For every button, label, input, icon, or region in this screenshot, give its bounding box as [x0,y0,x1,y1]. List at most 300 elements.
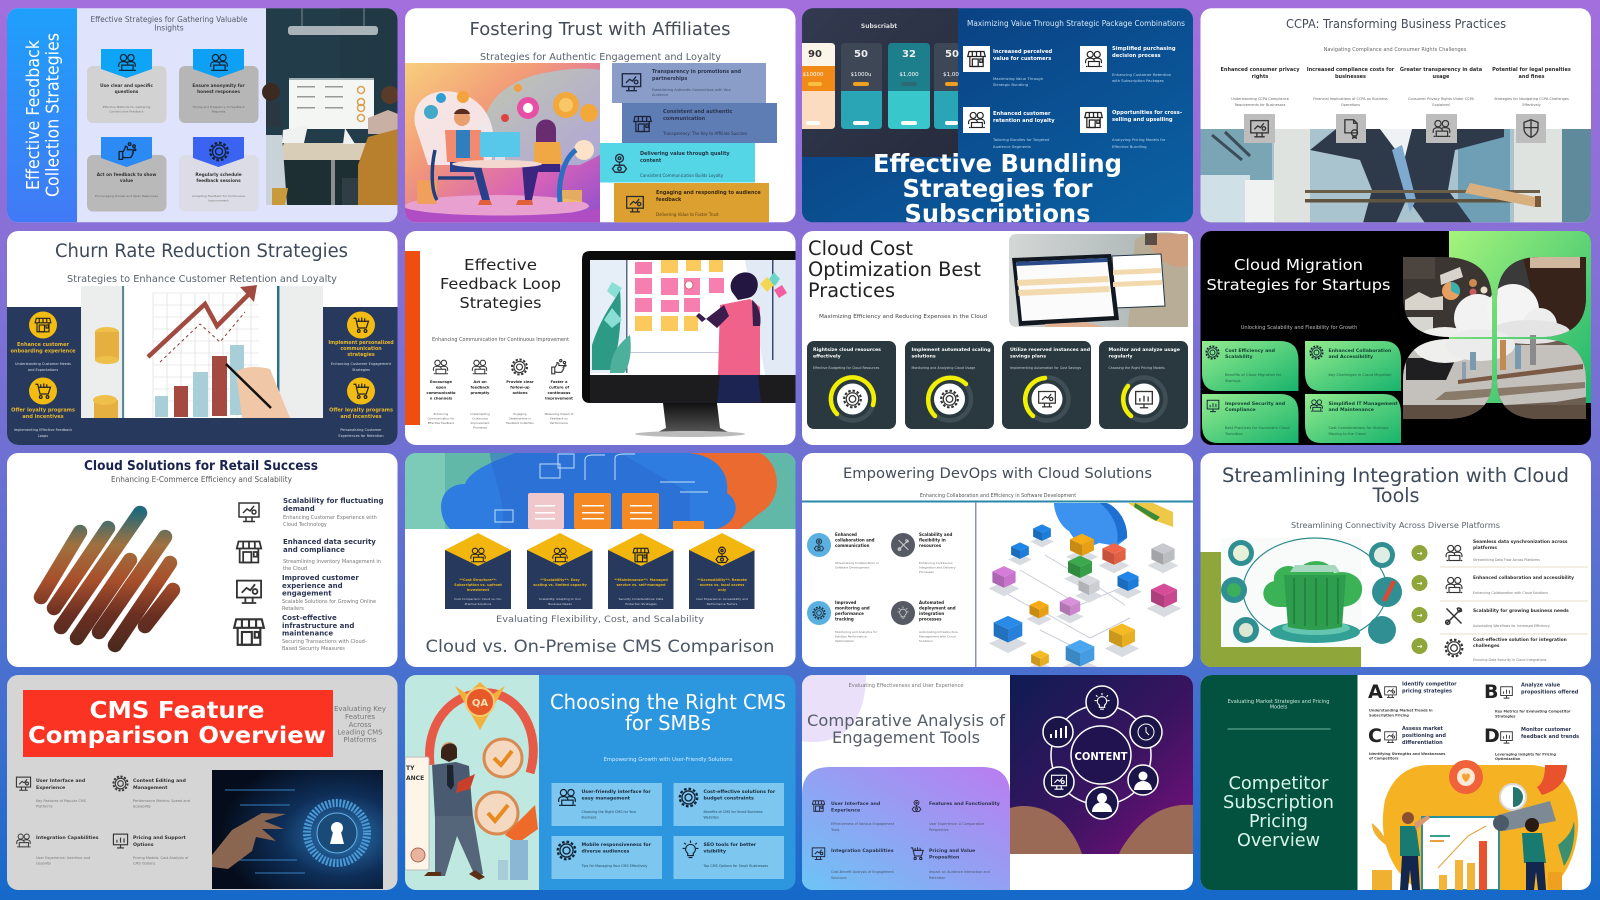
item: pricing: Pricing and Support [133,835,187,841]
item: cross-selling: selling and upselling [1112,117,1173,123]
heading: Maximizing Value Through Strategic Package Combinations [967,19,1185,28]
item: pricing [113,834,189,866]
box: cost-effective [674,783,784,826]
bar: consistent communication: Transparency: The Key to Affiliate Success [662,131,747,136]
title: Subscriptions [904,199,1090,228]
sidebar subtitle: Evaluating Market Strategies and Pricing [1228,699,1329,705]
box: cost-effective: Cost-effective solutions for [704,789,776,795]
item A [1368,681,1457,718]
card: security [1202,394,1298,443]
item: scalability: Enhancing Continuous [919,561,953,565]
column: open channels: Communication for [428,416,455,420]
card: automated scaling: Monitoring and Analyzing Cloud Usage [912,366,975,370]
side subtitle [334,705,386,744]
column: act promptly: Implementing [470,412,490,416]
item: personalized communication: Implement personalized [328,340,394,346]
item: data security: Streamlining Inventory Management in [283,559,381,565]
item: user interface: User Interface and [831,801,880,807]
row: data synchronization: Streamlining Data Flow Across Platforms [1473,558,1540,562]
column: culture: Foster a [551,380,568,384]
item: monitoring [807,600,878,643]
card: automated scaling: solutions [912,354,936,360]
row: cost-effective: challenges [1473,643,1500,649]
image: pricing table mockup [802,8,959,157]
photo: laptop with spreadsheet [1009,232,1188,327]
item: personalized communication: Enhancing Customer Engagement [331,362,392,366]
item: onboarding: Understanding Customer Needs [15,362,71,366]
column: cost structure: investment [467,588,489,592]
title: Optimization Best [808,258,981,281]
title [807,711,1005,747]
column: open channels: communicatio [426,391,456,395]
panel: CCPA Transforming Business Practices [1200,8,1592,223]
item: customer retention: retention and loyalty [993,118,1055,124]
column: culture [545,360,574,425]
bar: quality content: content [640,158,662,164]
column: scalability: Business Needs [548,602,572,606]
column: penalties: and fines [1519,74,1544,80]
item: customer experience [237,574,376,612]
item: scalability: resources [919,543,942,548]
illustration: QA businessman: QA [472,698,488,709]
box: mobile responsiveness: Mobile responsiveness for [582,842,652,848]
subtitle: Evaluating Flexibility, Cost, and Scalability [496,615,705,625]
item: purchasing decision: Enhancing Customer Retention [1112,72,1172,77]
item: customer experience: Improved customer [282,574,359,582]
accent bar [405,251,420,425]
column: follow-up: Provide clear [506,380,534,384]
item: personalized communication [328,312,394,372]
bar: quality content: Consistent Communication Builds Loyalty [640,173,724,178]
title: Engagement Tools [832,728,980,747]
row: data synchronization: platforms [1473,545,1497,551]
photo quadrants: cloud over laptop [1403,257,1586,419]
title: Empowering DevOps with Cloud Solutions [843,466,1152,482]
item: loyalty programs right [329,378,393,438]
box: SEO tools [674,836,784,879]
title: Fostering Trust with Affiliates [470,19,730,40]
sidebar title [7,8,77,223]
item: data security: Enhanced data security [283,538,376,546]
green accent block [1449,231,1591,403]
box: SEO tools: Top CMS Options for Small Businesses [702,864,768,868]
column: follow-up: Stakeholders in [509,416,531,420]
sidebar subtitle [1228,699,1329,710]
item D: feedback and trends [1521,734,1579,740]
item A: Subscription Pricing [1369,714,1409,718]
item: features [912,800,1000,832]
row: scalability: → [1417,612,1423,620]
card: cost efficiency: Startups [1225,379,1241,383]
column: open channels: Encourage [430,380,452,384]
subtitle: Navigating Compliance and Consumer Rights Challenges [1324,47,1467,53]
column: privacy rights [1220,67,1300,143]
card: reserved instances: savings plans [1010,354,1046,360]
column: compliance costs: Financial Implications of CCPA on Business [1313,97,1388,101]
column: open channels [426,360,456,425]
item: scalability [239,497,383,528]
title: Strategies for [902,174,1093,203]
box: SEO tools: visibility [704,848,726,854]
card: security: Compliance [1225,407,1256,413]
column: penalties: Potential for legal penalties [1492,67,1571,73]
subtitle: Enhancing Collaboration and Efficiency in Software Development [920,493,1076,499]
column: privacy rights: Requirements for Businesses [1235,103,1286,107]
item: data security [237,538,381,572]
sidebar subtitle: Models [1270,704,1288,710]
heading: Effective Strategies for Gathering Valuable [90,15,248,24]
item C: Identifying Strengths and Weaknesses [1369,752,1445,756]
item: features: Features and Functionality [929,801,1000,807]
sidebar title: Overview [1237,831,1320,851]
item: personalized communication: communication [340,346,382,352]
item B: Analyze value [1521,682,1561,688]
side subtitle: Leading CMS [337,728,383,736]
card: monitor usage [1099,341,1188,429]
column: maintenance: Security Considerations: Data [619,597,664,601]
item: integration: Usability [36,862,51,866]
strategy card: act on feedback [87,137,166,212]
item: pricing: Impact on Audience Interaction and [929,870,990,874]
column: act promptly: feedback [470,386,490,390]
row: data synchronization: → [1417,550,1423,558]
panel: Comparative Analysis of Engagement Tools [802,675,1193,890]
item: automation: Automating Infrastructure [919,630,958,634]
row: scalability: Automating Workflows for Increased Efficiency [1473,624,1550,628]
item: automation: Solutions [919,639,933,643]
bar: transparency: Audience [652,93,668,97]
illustration: isometric cloud network [989,503,1181,677]
panel: Cloud Cost Optimization [802,231,1193,446]
dark green sidebar [1200,675,1358,890]
row: data synchronization: Seamless data synchronization across [1473,539,1568,545]
title [808,237,981,302]
box: mobile responsiveness: diverse audiences [582,848,630,854]
item: user interface [16,777,87,808]
column: accessibility: Performance Factors [707,602,738,606]
bar: transparency: Establishing Authentic Connections with Your [652,88,732,92]
item: purchasing decision: with Subscription Packages [1112,78,1164,83]
row: collaboration: → [1417,580,1423,588]
item: features: User Experience: A Comparative [929,822,984,826]
item A: Identify competitor [1402,682,1457,688]
title: Streamlining Integration with Cloud [1222,464,1569,487]
item: monitoring: Monitoring and Analytics for [835,630,878,634]
item: collaboration: communication [835,543,870,548]
item: cost effective: Based Security Measures [282,646,345,652]
item: pricing [911,847,990,880]
panel: Cloud vs On-Premise CMS Comparison [405,453,796,668]
column: scalability [527,533,593,609]
item: collaboration [807,532,879,570]
column: scalability: scaling vs. limited capacity [533,583,588,587]
item: collaboration: collaboration and [835,538,875,542]
illustration: QA businessman: TY [406,765,415,772]
card: reserved instances [1002,341,1091,429]
item: onboarding: onboarding experience [10,348,76,354]
image: pricing table mockup: $10000 [802,72,824,78]
sidebar title: Collection Strategies [44,33,64,197]
item: user interface: Platforms [36,804,53,808]
strategy card: act on feedback: value [120,178,133,184]
item: cross-selling: Effective Bundling [1112,144,1147,149]
item: monitoring: Improved [835,600,857,605]
box: mobile responsiveness [552,836,662,879]
item: integration [17,834,99,866]
card: IT management: Cost Considerations for Startups [1328,426,1388,430]
item: personalized communication: strategies [347,352,375,358]
side subtitle: Evaluating Key [334,705,386,713]
card: rightsize resources: effectively [813,354,841,360]
item: cost effective: Cost-effective [282,614,337,622]
column: act promptly: Processes [473,426,487,430]
row: collaboration: Enhancing Collaboration with Cloud Solutions [1473,591,1548,595]
item: loyalty programs right: Experiences for Retention [338,434,384,438]
column: data transparency: usage [1433,74,1450,80]
card: collaboration: and Accessibility [1328,354,1373,360]
item: pricing: Retention [929,876,945,880]
subtitle: Evaluating Effectiveness and User Experience [849,683,963,689]
title: Strategies for Startups [1206,276,1391,294]
image: pricing table mockup: Subscriabt [861,23,897,30]
item: monitoring: DevOps Performance [835,634,867,638]
bar: transparency [612,63,766,103]
subtitle: Streamlining Connectivity Across Diverse Platforms [1291,521,1500,530]
item: automation: processes [919,616,942,622]
title: Comparative Analysis of [807,711,1005,730]
column: culture: improvement [545,396,573,400]
card: IT management: Simplified IT Management [1328,401,1398,407]
item: scalability: Scalability for fluctuating [283,497,383,505]
column: privacy rights: Enhanced consumer privacy [1220,67,1300,73]
item: perceived value: value for customers [993,56,1051,62]
item: cross-selling: Opportunities for cross- [1112,110,1182,116]
item: user interface: Effectiveness of Various Engagement [831,822,895,826]
card: reserved instances: Implementing Automation for Cost Savings [1010,366,1081,370]
panel: Cloud Migration Strategies [1200,231,1592,446]
title: Practices [808,279,895,302]
row: collaboration [1412,575,1574,595]
sidebar title: Effective Feedback [24,39,44,190]
column: data transparency: Explained [1432,103,1450,107]
item: data security: the Cloud [283,566,307,572]
card: security: Transition [1224,432,1243,436]
item: user interface: Key Features of Popular CMS [36,799,87,803]
sidebar title: Competitor [1228,774,1329,794]
item: pricing: Pricing Models: Cost Analysis of [133,856,189,860]
item: integration: Integration Capabilities [831,848,894,854]
column: open channels: Effective Feedback [428,421,455,425]
card: rightsize resources [807,341,896,429]
item: collaboration: Software Development [835,566,870,570]
panel: Competitor Subscription Pricing Overview [1200,675,1592,890]
item C: of Competitors [1369,756,1398,760]
column: maintenance [608,533,674,609]
photo: meeting room [262,8,399,205]
title: Tools [1372,484,1420,507]
title: for SMBs [625,711,711,735]
bar: consistent communication [622,103,777,143]
item: customer experience: Retailers [282,606,304,612]
card: automated scaling: Implement automated scaling [912,347,991,353]
column: compliance costs [1307,67,1395,143]
heading [90,15,248,32]
item: onboarding: and Expectations [28,368,58,372]
column: penalties: Effectively [1522,103,1541,107]
item: onboarding: Enhance customer [17,342,70,348]
item: customer retention: Audience Segments [993,144,1031,149]
strategy card: clear questions [87,49,166,123]
item: user interface [812,801,895,832]
strategy card: anonymity: Ensure anonymity for [192,83,245,89]
subtitle: Unlocking Scalability and Flexibility for Growth [1241,325,1357,331]
column: penalties: Strategies for Navigating CCPA Challenges [1494,97,1569,101]
column: culture: Measuring Impact of [545,412,574,416]
box: user-friendly interface: Business [582,816,597,820]
item: scalability: Processes [919,570,934,574]
title: Cloud vs. On-Premise CMS Comparison [426,637,774,657]
row: cost-effective: Cost-effective solution for integration [1473,637,1567,643]
item: scalability: Cloud Technology [283,522,327,528]
column: follow-up: follow-up [510,386,530,390]
photo: businessman pulling ropes [1200,129,1592,223]
item: pricing: Options [133,842,154,848]
card: rightsize resources: Effective Budgeting for Cloud Resources [813,366,880,370]
illustration: QA businessman: ANCE [406,775,424,782]
column: maintenance: Protection Strategies [625,602,657,606]
card: collaboration: Key Challenges in Cloud Migration [1328,373,1392,377]
title: Cloud Solutions for Retail Success [84,459,318,474]
column: accessibility [689,533,755,609]
subtitle: Strategies to Enhance Customer Retention and Loyalty [67,274,337,285]
item: scalability: Scalability and [919,532,952,537]
card: monitor usage: Monitor and analyze usage [1108,347,1180,353]
card: IT management [1305,394,1401,443]
item: purchasing decision [1080,46,1176,83]
column: act promptly: Improvement [471,421,490,425]
sidebar title: Subscription [1223,793,1334,813]
item: customer retention [963,107,1055,149]
image: pricing table mockup: $1000u [851,72,871,78]
item: onboarding [10,312,76,372]
strategy card: anonymity: Requests [212,110,226,114]
image: pricing table mockup: $1,000 [899,72,919,78]
row: scalability: Scalability for growing business needs [1473,608,1569,614]
column: cost structure: Cost Comparison: Cloud vs. On- [454,597,502,601]
column: scalability: Scalability: Adapting to Your [539,597,582,601]
item: user interface: User Interface and [36,778,85,784]
item C: C [1368,725,1382,747]
card: IT management: and Maintenance [1328,407,1374,413]
item: loyalty programs right: and incentives [340,414,382,420]
image: diagonal retail photo strips [41,513,173,645]
illustration: desktop monitor with sticky notes [582,251,800,437]
item: cross-selling: Analyzing Pricing Models for [1112,137,1166,142]
item: scalability [891,532,956,574]
item: automation: deployment and [919,606,956,610]
column: compliance costs: Increased compliance costs for [1307,67,1395,73]
card: reserved instances: Utilize reserved instances and [1010,347,1090,353]
column: act promptly: promptly [471,391,490,395]
column: maintenance: **Maintenance**: Managed [614,578,668,582]
column: open channels: n channels [430,396,453,400]
card: rightsize resources: Rightsize cloud resources [813,347,881,353]
item D: Leveraging Insights for Pricing [1495,752,1556,756]
title [440,256,561,312]
subtitle: Enhancing E-Commerce Efficiency and Scalability [111,475,293,484]
item B: Key Metrics for Evaluating Competitor [1495,710,1571,714]
strategy card: anonymity: Timing and Frequency of Feedback [191,105,245,109]
heading: Insights [154,24,184,32]
panel: Effective Feedback Loop Strategies [405,231,800,446]
image: content cycle in open hands: CONTENT [1074,750,1128,763]
row: scalability [1412,607,1569,628]
bar: transparency: partnerships [652,76,687,82]
item: pricing: Proposition [929,854,959,860]
row: data synchronization [1412,539,1568,562]
illustration: QA businessman [405,675,539,890]
title: Strategies [460,294,542,312]
column: data transparency [1400,67,1482,143]
box: mobile responsiveness: Tips for Managing Your CMS Effectively [580,864,647,868]
sidebar title [1223,774,1334,851]
panel: Effective Bundling Strategies [802,8,1193,228]
item: loyalty programs right: Personalizing Customer [340,428,382,432]
column: act promptly: Act on [473,380,487,384]
title: Feedback Loop [440,275,561,293]
card: security: Improved Security and [1225,401,1285,407]
bar: audience feedback: feedback [656,197,682,203]
item: scalability: Enhancing Customer Experience with [283,515,377,521]
item: scalability: demand [283,505,315,513]
column: privacy rights: Understanding CCPA Compliance [1231,97,1289,101]
column: cost structure: Subscription vs. upfront [454,583,502,587]
item: automation [891,600,958,643]
card: collaboration: Enhanced Collaboration [1328,348,1391,354]
item: monitoring: tracking [835,616,854,622]
subtitle: Strategies for Authentic Engagement and Loyalty [480,52,721,63]
item: integration: Integration Capabilities [36,835,99,841]
sidebar title: Pricing [1249,812,1308,832]
column: maintenance: service vs. self-managed [616,583,666,587]
item: perceived value: Strategic Bundling [993,82,1029,87]
column: accessibility: User Experience: Accessibility and [696,597,748,601]
column: culture: continuous [548,391,571,395]
item D: Monitor customer [1521,727,1572,733]
item: loyalty programs left: Implementing Effective Feedback [14,428,73,432]
panel: Churn Rate Reduction Strategies [7,231,398,446]
column: scalability: **Scalability**: Easy [540,578,581,582]
item: pricing: CMS Options [133,862,155,866]
item: customer experience: engagement [282,590,332,598]
bar: audience feedback: Delivering Value to Foster Trust [656,212,719,217]
item: content editing: Scalability [133,804,151,808]
item: monitoring: performance [835,611,864,616]
item D: Optimization [1495,757,1521,761]
item: cost effective: maintenance [282,630,333,638]
item: content editing [113,776,190,808]
panel: Empowering DevOps with Cloud Solutions [802,453,1193,677]
column: accessibility: access vs. local access [700,583,744,587]
bar: quality content: Delivering value through quality [640,151,730,157]
card: monitor usage: Choosing the Right Pricing Models [1108,366,1165,370]
column: open channels: open [436,386,447,390]
card: security: Best Practices for Successful Cloud [1225,426,1290,430]
image: pricing table mockup: 50 [945,49,959,60]
title: CCPA: Transforming Business Practices [1286,17,1506,31]
column: follow-up: Engaging [513,412,527,416]
item: cross-selling [1080,107,1182,149]
